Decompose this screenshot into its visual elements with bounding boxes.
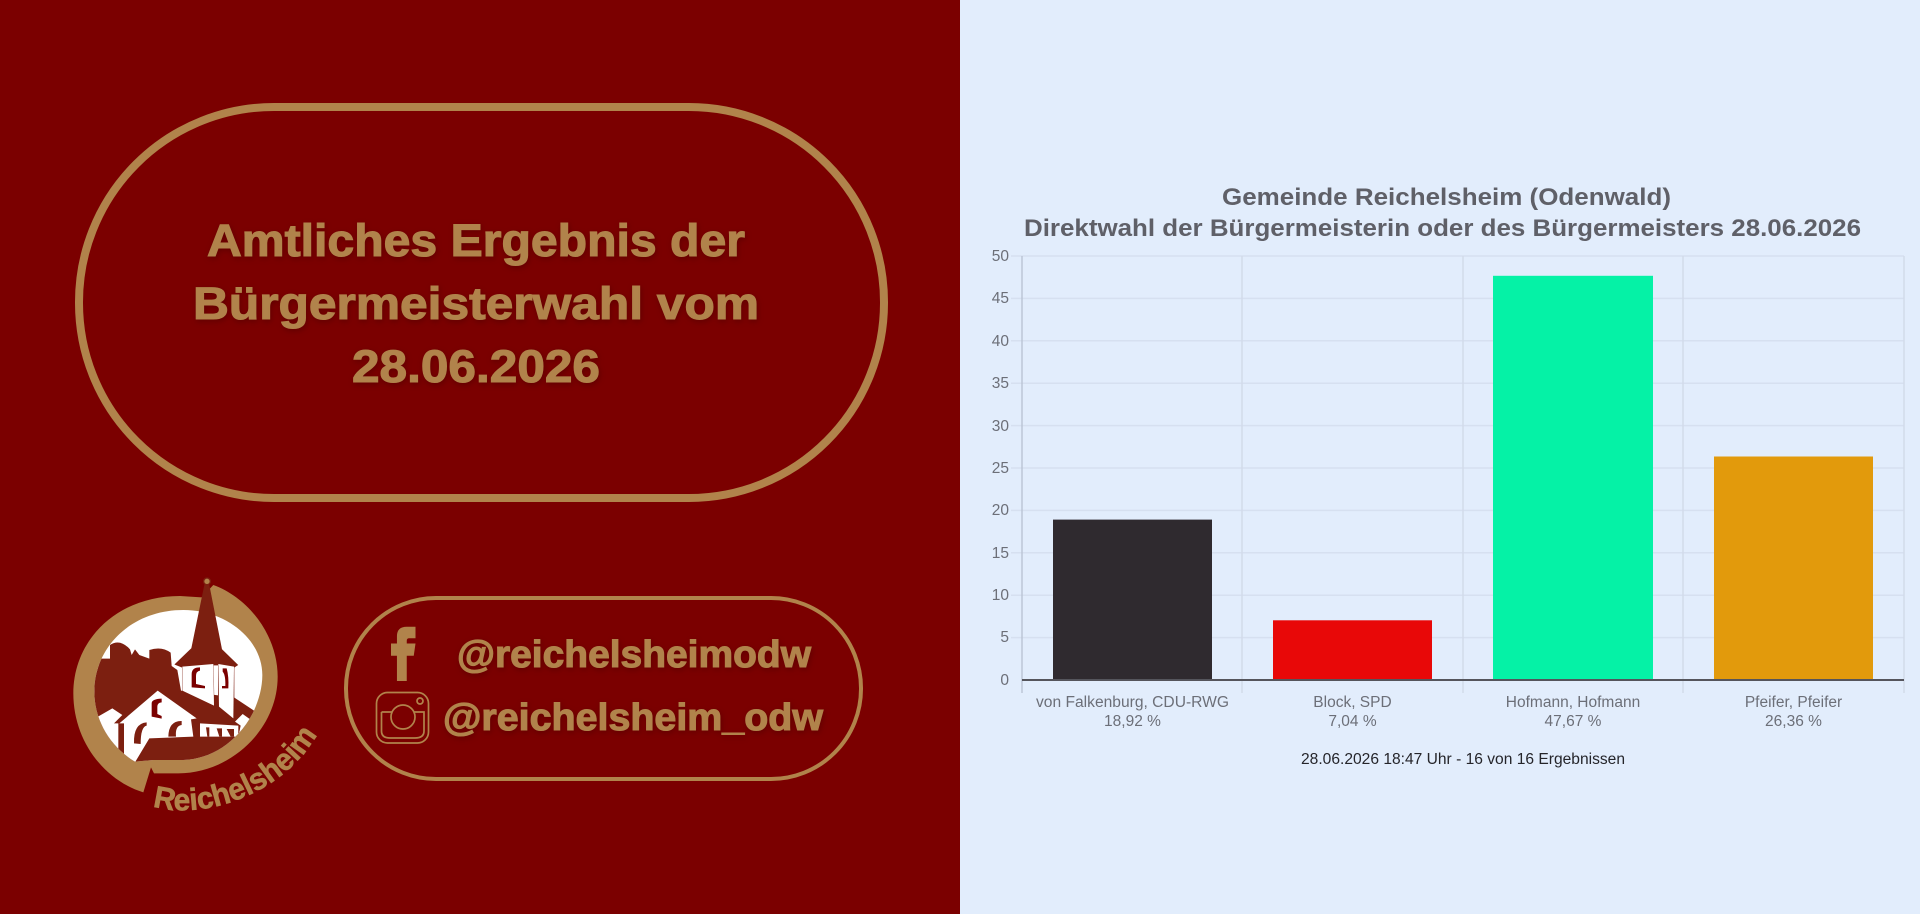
x axis labels: [1036, 694, 1842, 730]
logo village scene: [94, 642, 254, 762]
y axis labels: 5: [1000, 629, 1009, 646]
panel: left red background: [0, 0, 960, 914]
headline text: [193, 215, 759, 392]
logo tower left face: [182, 664, 214, 706]
logo: Reichelsheim church emblem: [73, 578, 317, 811]
logo tower windows: [192, 667, 228, 688]
y axis labels: [992, 248, 1009, 689]
bar chart: [992, 248, 1904, 730]
bar: Hofmann 47,67: [1493, 276, 1653, 680]
logo small windows: [206, 727, 234, 737]
x axis labels: Block, SPD: [1313, 694, 1392, 711]
facebook handle: @reichelsheimodw: [457, 634, 811, 676]
social media pill: [346, 598, 861, 779]
social pill outline: [346, 598, 861, 779]
y axis labels: 10: [992, 587, 1009, 604]
logo wordmark: Reichelsheim: [154, 728, 317, 811]
panel: right chart background: [960, 0, 1920, 914]
logo gold ring: [73, 585, 278, 792]
logo central gable house: [119, 691, 197, 762]
bar: Pfeifer 26,36: [1714, 456, 1873, 680]
x axis labels: Pfeifer, Pfeifer: [1745, 694, 1842, 711]
logo white inner: [94, 610, 262, 762]
chart title: Direktwahl der Bürgermeisterin oder des Bürgermeisters 28.06.2026: [1024, 215, 1861, 242]
logo gable window: [152, 699, 162, 719]
y axis labels: 15: [992, 545, 1009, 562]
y axis labels: 50: [992, 248, 1009, 265]
chart title: Gemeinde Reichelsheim (Odenwald): [1222, 184, 1671, 211]
x axis labels: 26,36 %: [1765, 713, 1822, 730]
y axis labels: 25: [992, 460, 1009, 477]
x axis labels: 18,92 %: [1104, 713, 1161, 730]
chart footer timestamp: 28.06.2026 18:47 Uhr - 16 von 16 Ergebnissen: [1301, 751, 1625, 768]
x axis labels: 7,04 %: [1328, 713, 1377, 730]
bar: von Falkenburg 18,92: [1053, 520, 1212, 680]
icon: facebook: [391, 627, 416, 681]
y axis labels: 30: [992, 418, 1009, 435]
logo castle hill and roofs: [94, 642, 254, 762]
x axis labels: 47,67 %: [1545, 713, 1602, 730]
instagram handle: @reichelsheim_odw: [443, 697, 823, 739]
logo long wall: [200, 723, 238, 737]
logo right small gable: [235, 714, 250, 733]
bar: Block 7,04: [1273, 620, 1432, 680]
logo arches: [134, 721, 182, 744]
y axis labels: 45: [992, 290, 1009, 307]
headline text: Bürgermeisterwahl vom: [193, 278, 759, 329]
icon: instagram: [376, 692, 428, 743]
logo left small house: [98, 708, 122, 749]
headline text: Amtliches Ergebnis der: [207, 215, 745, 266]
x axis labels: von Falkenburg, CDU-RWG: [1036, 694, 1229, 711]
chart title: [1024, 184, 1861, 242]
y axis labels: 35: [992, 375, 1009, 392]
y axis labels: 20: [992, 502, 1009, 519]
y axis labels: 40: [992, 333, 1009, 350]
logo spire ball: [204, 578, 210, 585]
headline text: 28.06.2026: [352, 341, 600, 392]
logo church spire: [175, 583, 238, 719]
logo tower right face: [218, 664, 234, 718]
x axis labels: Hofmann, Hofmann: [1506, 694, 1640, 711]
y axis labels: 0: [1000, 672, 1009, 689]
headline pill: [79, 107, 884, 498]
pill outline: [79, 107, 884, 498]
